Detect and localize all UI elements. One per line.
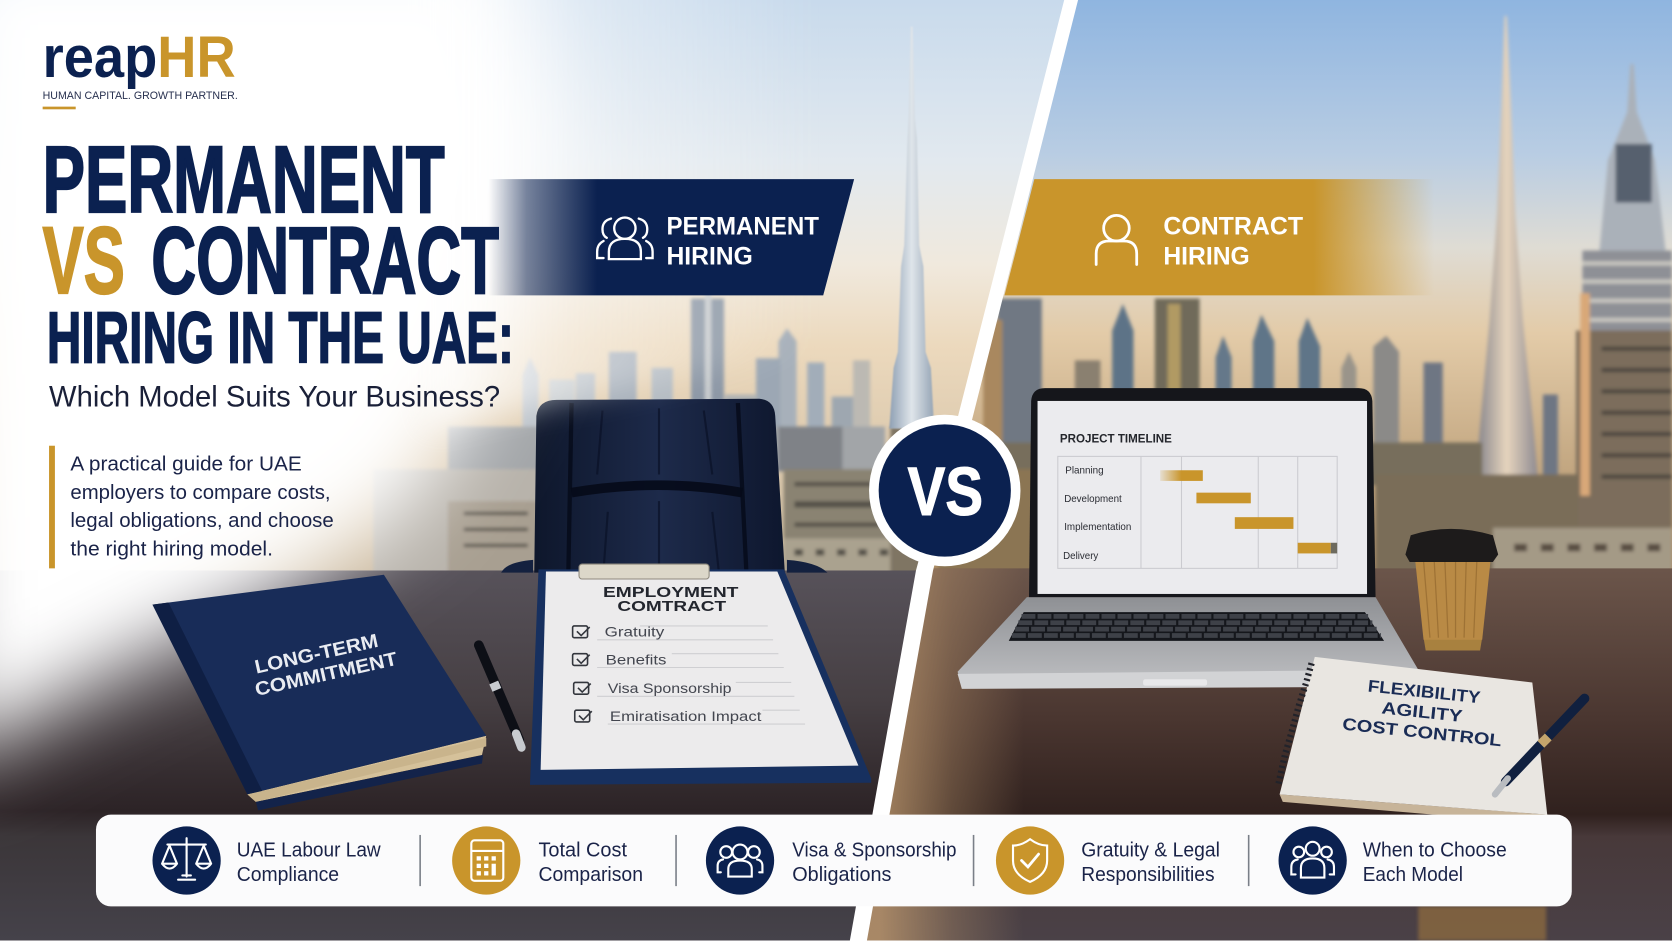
title word: vs: VS: [43, 208, 125, 314]
icon: people: [706, 826, 774, 895]
feature: gratuity and legal: [996, 826, 1220, 895]
burj khalifa left tower: [889, 27, 934, 429]
white fade over left side: [0, 0, 554, 768]
icon: scales: [152, 826, 221, 895]
feature: cost comparison: [452, 826, 643, 895]
gantt chart: project timeline: PROJECT TIMELINE: [1060, 433, 1172, 446]
skyline right: [938, 16, 1672, 576]
text block: intro: employers to compare costs,: [70, 482, 331, 504]
feature: when to choose: Each Model: [1363, 864, 1463, 886]
gantt chart: project timeline: Delivery: [1063, 551, 1099, 562]
coffee cup: [1405, 529, 1498, 650]
banner: permanent hiring: [488, 179, 854, 295]
banner label: HIRING: [1163, 243, 1250, 270]
notepad text: AGILITY: [1381, 698, 1464, 726]
banner label: CONTRACT: [1163, 214, 1303, 241]
clipboard: employment contract: Benefits: [606, 651, 667, 667]
icon: pen right: [1495, 698, 1585, 794]
skyline left: [373, 293, 954, 576]
notepad: flexibility agility cost control: [1279, 657, 1548, 824]
clipboard: employment contract: [530, 564, 871, 785]
feature: labour law: [152, 826, 381, 895]
icon: calculator: [452, 826, 520, 895]
notepad text: FLEXIBILITY: [1367, 677, 1482, 707]
spiral binding: [1279, 663, 1312, 784]
title word: contract: CONTRACT: [151, 208, 499, 314]
notepad text: [1341, 677, 1503, 750]
subtitle: Which Model Suits Your Business?: [49, 380, 500, 413]
feature: labour law: Compliance: [237, 864, 339, 886]
notepad text: COST CONTROL: [1341, 715, 1503, 750]
text block: intro: legal obligations, and choose: [70, 510, 334, 532]
title: [43, 127, 514, 413]
office chair: [501, 399, 827, 573]
banner label: HIRING: [666, 243, 753, 270]
gantt chart: project timeline: Planning: [1065, 465, 1104, 476]
clipboard: employment contract: Visa Sponsorship: [608, 680, 732, 696]
icon: single person: [1096, 215, 1137, 264]
gantt chart: project timeline: Development: [1064, 494, 1122, 505]
feature: gratuity and legal: Gratuity & Legal: [1081, 839, 1220, 861]
feature: cost comparison: Comparison: [538, 864, 643, 886]
vs badge: [869, 415, 1020, 566]
title line: hiring in the uae: HIRING IN THE UAE:: [47, 298, 514, 379]
logo wordmark: reapHR: [43, 25, 236, 90]
feature: cost comparison: Total Cost: [538, 839, 627, 861]
feature: labour law: UAE Labour Law: [237, 839, 381, 861]
feature: visa sponsorship: [706, 826, 956, 895]
laptop: [958, 388, 1418, 689]
icon: team: [1279, 826, 1347, 895]
banner: contract hiring: [1004, 179, 1434, 295]
notebook: long-term commitment: [152, 575, 486, 810]
text block: intro: [49, 446, 334, 568]
text block: intro: A practical guide for UAE: [70, 453, 302, 475]
logo tagline: HUMAN CAPITAL. GROWTH PARTNER.: [43, 90, 238, 102]
icon: pen left: [479, 645, 521, 747]
laptop screen: [1029, 388, 1376, 597]
gantt chart: project timeline: [1058, 433, 1337, 568]
feature: visa sponsorship: Obligations: [792, 864, 891, 886]
notebook: long-term commitment: LONG-TERM: [253, 631, 380, 679]
title line: permanent: PERMANENT: [43, 127, 445, 233]
contract heading: COMTRACT: [617, 598, 726, 615]
vs badge: VS: [907, 454, 983, 530]
contract heading: EMPLOYMENT: [603, 584, 738, 601]
feature: when to choose: [1279, 826, 1507, 895]
panel: feature bar: [96, 815, 1572, 906]
clip: [579, 564, 709, 579]
icon: shield check: [996, 826, 1064, 895]
panel: permanent hiring scene: [0, 0, 1077, 941]
checklist: [573, 626, 592, 722]
divider: diagonal white line: [850, 0, 1078, 941]
icon: people group: [597, 218, 653, 259]
text block: intro: the right hiring model.: [70, 539, 273, 561]
banner label: PERMANENT: [666, 214, 819, 241]
feature: when to choose: When to Choose: [1363, 839, 1507, 861]
feature: visa sponsorship: Visa & Sponsorship: [792, 839, 956, 861]
clipboard: employment contract: Emiratisation Impact: [610, 708, 762, 724]
logo: [43, 25, 238, 109]
notebook: long-term commitment: COMMITMENT: [253, 649, 400, 701]
panel: contract hiring scene: [853, 0, 1672, 941]
laptop base: [958, 597, 1418, 685]
gantt chart: project timeline: Implementation: [1064, 522, 1131, 533]
feature: gratuity and legal: Responsibilities: [1081, 864, 1215, 886]
clipboard: employment contract: Gratuity: [605, 624, 664, 640]
